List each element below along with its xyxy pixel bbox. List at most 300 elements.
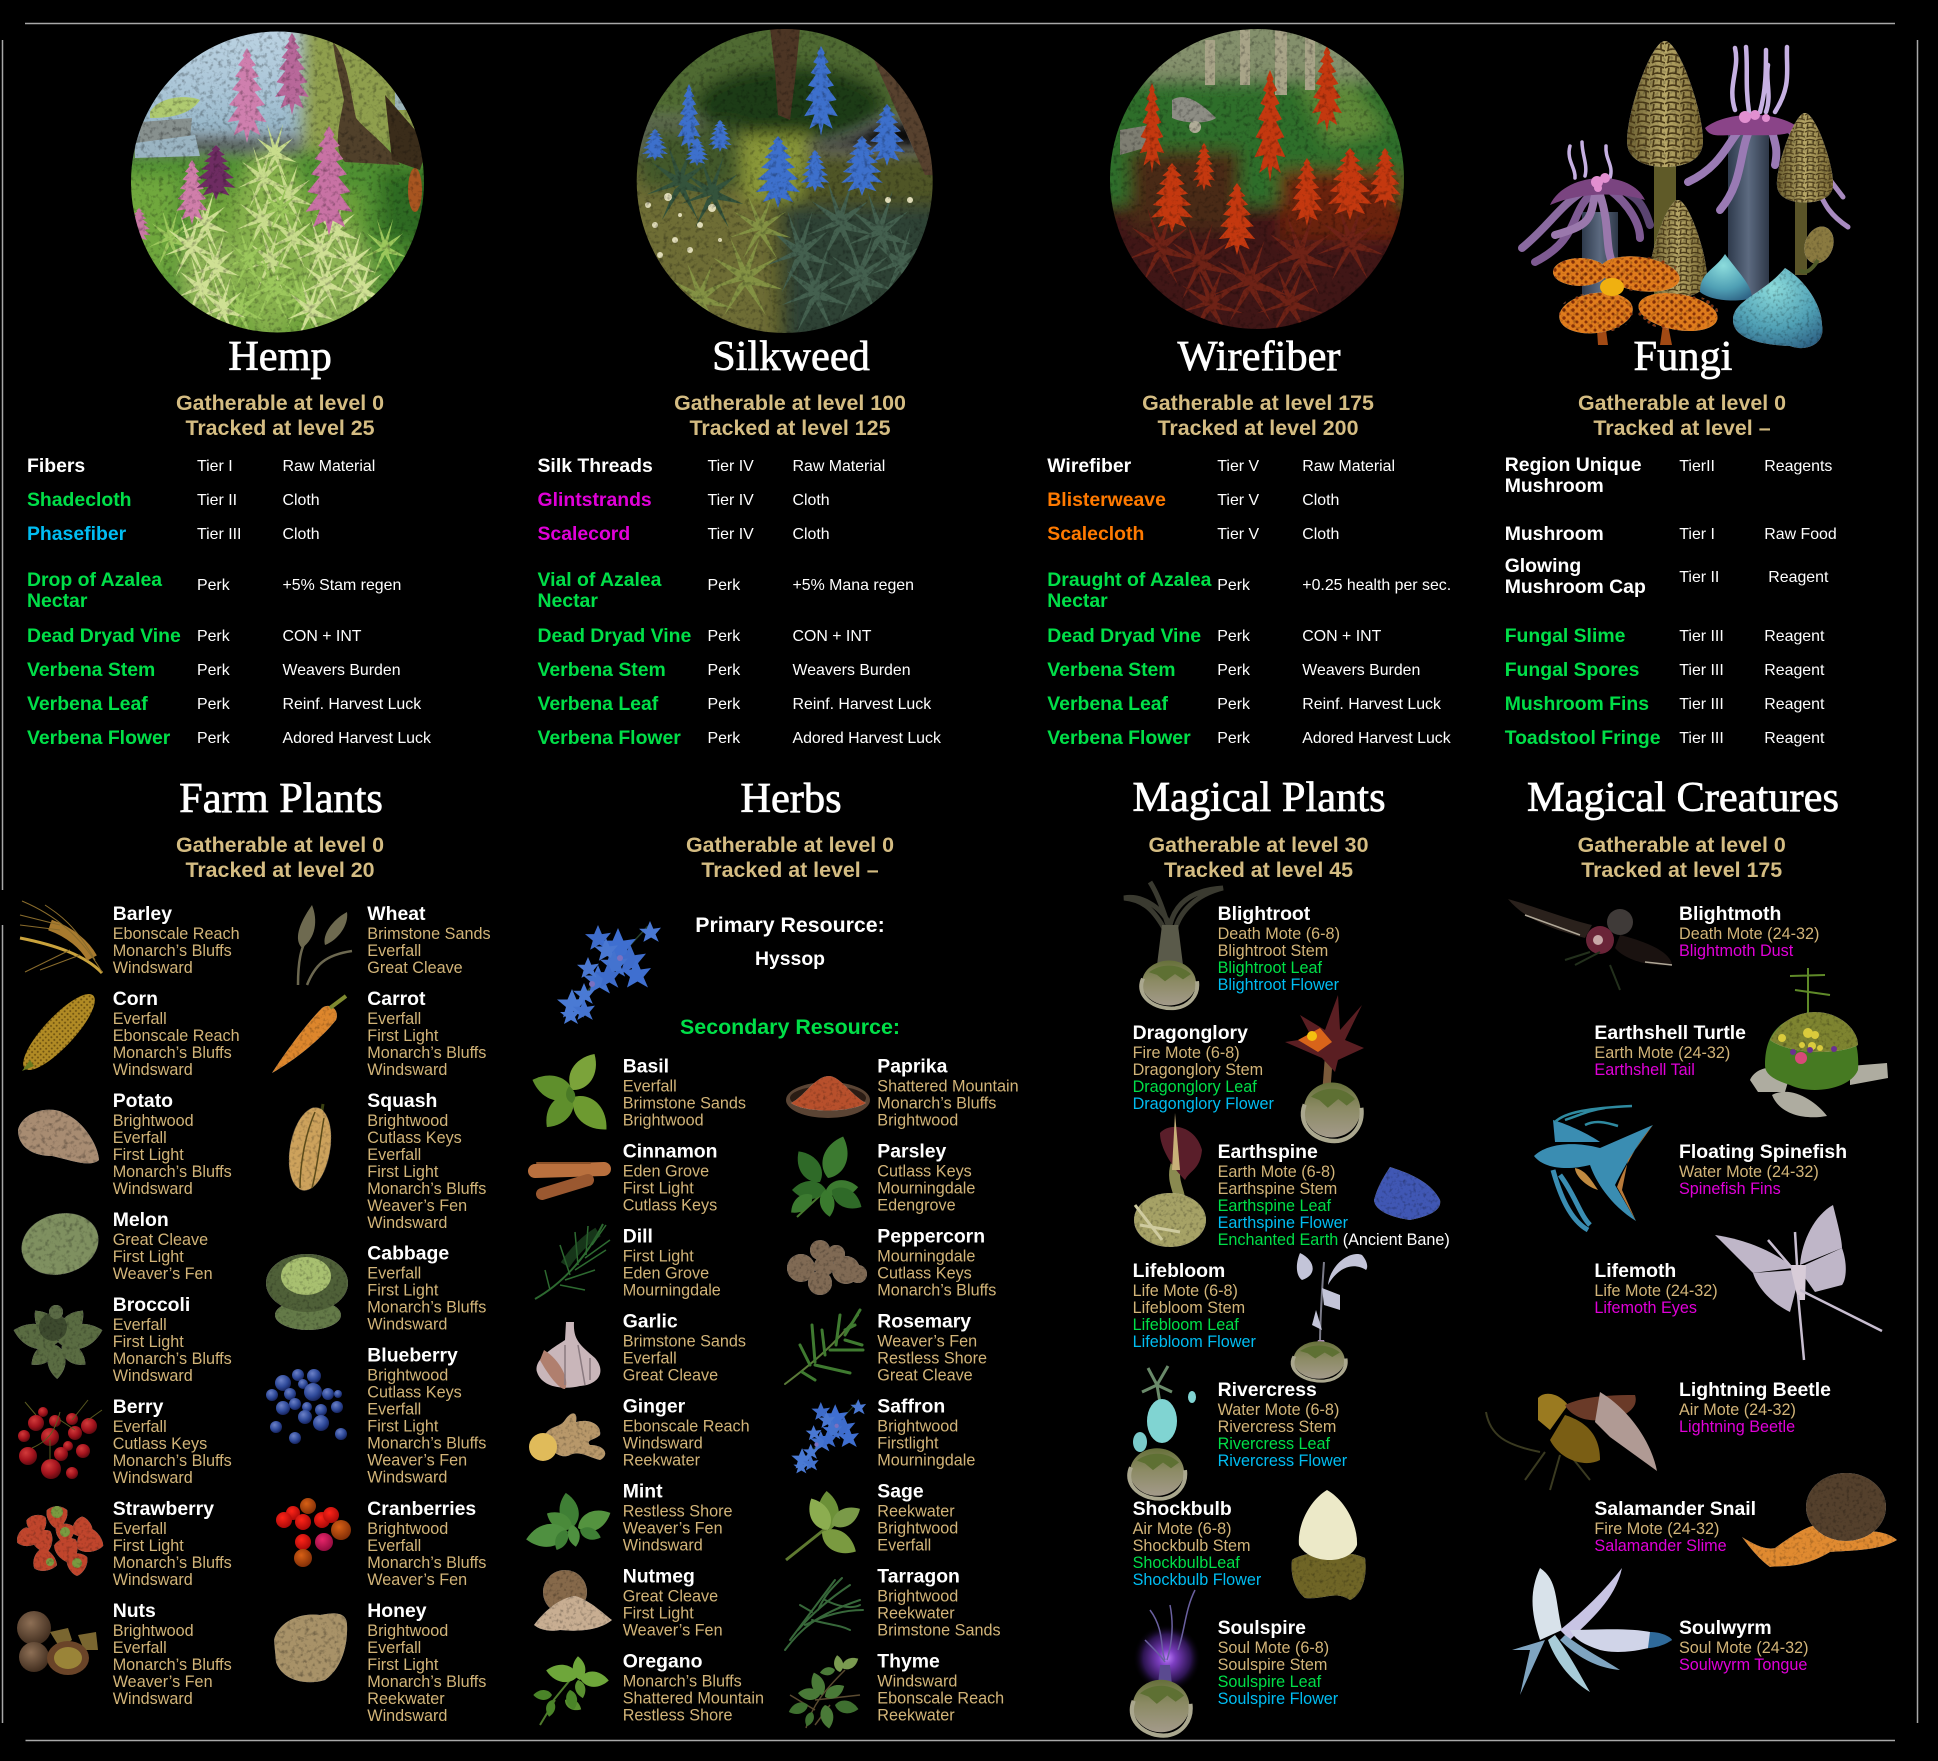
icon: broccoli — [11, 1305, 105, 1379]
text: Berry: Cutlass Keys — [113, 1435, 207, 1453]
table: Silkweed resources: Perk — [708, 577, 740, 594]
text: Squash: Monarch’s Bluffs — [367, 1180, 486, 1198]
icon: honey — [274, 1613, 347, 1682]
heading: Fungi: Fungi — [1634, 333, 1732, 380]
text: Thyme: Windsward — [877, 1672, 957, 1690]
text: Salamander Snail: Salamander Snail — [1594, 1498, 1756, 1520]
text: Lifemoth — [1594, 1260, 1718, 1317]
text: Cabbage: Windsward — [367, 1316, 447, 1334]
text: Rivercress: Rivercress Stem — [1218, 1418, 1336, 1436]
text: Floating Spinefish: Floating Spinefish — [1679, 1141, 1847, 1163]
text: Basil: Brightwood — [623, 1112, 704, 1130]
levels: Hemp — [176, 391, 384, 440]
table: Fungi resources: Mushroom — [1505, 475, 1604, 497]
text: Rivercress: Rivercress — [1218, 1379, 1317, 1401]
icon: ancient bane rock — [1374, 1167, 1440, 1220]
icon: barley — [20, 901, 102, 973]
text: Blueberry — [367, 1344, 486, 1486]
icon: potato — [18, 1110, 99, 1163]
text: Nuts: Everfall — [113, 1639, 167, 1657]
table: Fungi resources: Reagent — [1764, 662, 1825, 679]
text: Mint — [623, 1480, 732, 1554]
text: Shockbulb: Shockbulb — [1133, 1498, 1232, 1520]
text: Earthspine — [1218, 1141, 1450, 1249]
text: Corn: Everfall — [113, 1010, 167, 1028]
text: Nutmeg: Nutmeg — [623, 1566, 695, 1588]
text: Sage: Brightwood — [877, 1520, 958, 1538]
icon: mint — [524, 1491, 614, 1553]
text: Rivercress: Rivercress Leaf — [1218, 1435, 1331, 1453]
text: Soulspire: Soulspire Leaf — [1218, 1673, 1322, 1691]
text: Tarragon: Tarragon — [877, 1566, 960, 1588]
icon: rosemary — [785, 1310, 863, 1384]
levels: Magical Plants: Gatherable at level 30 — [1149, 833, 1369, 857]
text: Ginger: Ginger — [623, 1396, 686, 1418]
text: Blightroot: Blightroot Flower — [1218, 976, 1340, 994]
table: Silkweed resources: Verbena Stem — [538, 659, 666, 681]
text: Lightning Beetle: Lightning Beetle — [1679, 1379, 1831, 1401]
text: Nutmeg: First Light — [623, 1604, 694, 1622]
text: Potato — [113, 1090, 232, 1198]
text: Carrot: Monarch’s Bluffs — [367, 1044, 486, 1062]
icon: saffron — [791, 1399, 866, 1473]
text: Tarragon: Brimstone Sands — [877, 1622, 1001, 1640]
table: Wirefiber resources — [1047, 455, 1451, 749]
text: Shockbulb: ShockbulbLeaf — [1133, 1554, 1240, 1572]
levels: Silkweed — [674, 391, 906, 440]
table: Silkweed resources: Adored Harvest Luck — [792, 730, 941, 747]
panel: Wirefiber — [1047, 0, 1451, 749]
table: Silkweed resources: Glintstrands — [538, 489, 652, 511]
table: Hemp resources: Verbena Flower — [27, 727, 171, 749]
panel: Magical Plants — [1124, 774, 1450, 1736]
table: Fungi resources: Mushroom — [1505, 523, 1604, 545]
table: Wirefiber resources: Cloth — [1302, 492, 1339, 509]
text: Lifebloom: Lifebloom — [1133, 1260, 1225, 1282]
text: Earthspine: Earthspine — [1218, 1141, 1318, 1163]
text: Broccoli — [113, 1294, 232, 1385]
text: Barley — [113, 903, 240, 977]
icon: rivercress — [1129, 1366, 1196, 1499]
text: Potato: First Light — [113, 1146, 184, 1164]
icon: dill — [535, 1224, 610, 1299]
levels: Magical Plants — [1149, 833, 1369, 882]
table: Silkweed resources: Tier IV — [708, 526, 754, 543]
text: Paprika: Brightwood — [877, 1112, 958, 1130]
table: Wirefiber resources: Blisterweave — [1047, 489, 1166, 511]
text: Earthshell Turtle: Earthshell Tail — [1594, 1061, 1695, 1079]
text: Honey: First Light — [367, 1656, 439, 1674]
text: Saffron: Mourningdale — [877, 1452, 975, 1470]
icon: tarragon — [785, 1578, 863, 1650]
icon: oregano — [533, 1656, 609, 1725]
text: Cinnamon — [623, 1140, 717, 1214]
icon: garlic — [537, 1322, 600, 1389]
table: Hemp resources: Perk — [197, 577, 230, 594]
icon: soulwyrm — [1512, 1568, 1672, 1695]
image: hemp field circle — [131, 32, 424, 332]
levels: Fungi: Gatherable at level 0 — [1578, 391, 1786, 415]
text: Basil: Brimstone Sands — [623, 1094, 746, 1112]
text: Nuts: Brightwood — [113, 1622, 194, 1640]
text: Soulwyrm — [1679, 1617, 1809, 1674]
text: Honey: Monarch’s Bluffs — [367, 1673, 486, 1691]
text: Oregano — [623, 1650, 764, 1724]
text: Basil — [623, 1056, 746, 1130]
table: Hemp resources: Weavers Burden — [282, 662, 401, 679]
icon: dragonglory — [1285, 995, 1364, 1141]
text: Parsley: Parsley — [877, 1140, 947, 1162]
text: Mint: Mint — [623, 1480, 663, 1502]
text: Oregano: Oregano — [623, 1650, 703, 1672]
table: Hemp resources: Dead Dryad Vine — [27, 625, 181, 647]
text: Lifebloom — [1133, 1260, 1256, 1351]
text: Shockbulb: Shockbulb Stem — [1133, 1537, 1250, 1555]
text: Soulspire: Soulspire — [1218, 1617, 1306, 1639]
table: Hemp resources: Reinf. Harvest Luck — [282, 696, 421, 713]
table: Hemp resources: Drop of Azalea — [27, 569, 162, 591]
text: Rosemary: Rosemary — [877, 1310, 971, 1332]
table: Silkweed resources: Dead Dryad Vine — [538, 625, 691, 647]
table: Wirefiber resources: +0.25 health per sec. — [1302, 577, 1451, 594]
text: primary resource: Primary Resource: — [695, 913, 885, 937]
icon: blightmoth — [1508, 899, 1672, 990]
table: Hemp resources — [27, 455, 431, 749]
text: Broccoli: Windsward — [113, 1367, 193, 1385]
text: Carrot: Carrot — [367, 988, 426, 1010]
heading: Silkweed: Silkweed — [712, 333, 870, 380]
text: Soulspire: Soul Mote (6-8) — [1218, 1639, 1329, 1657]
text: Barley: Ebonscale Reach — [113, 925, 240, 943]
text: Nuts: Weaver’s Fen — [113, 1673, 213, 1691]
panel: Magical Creatures — [1486, 774, 1897, 1695]
text: Dragonglory: Dragonglory Flower — [1133, 1095, 1274, 1113]
text: Earthspine: Earthspine Stem — [1218, 1180, 1337, 1198]
table: Fungi resources: Toadstool Fringe — [1505, 727, 1661, 749]
icon: peppercorn — [787, 1240, 867, 1295]
text: Melon: Weaver’s Fen — [113, 1265, 213, 1283]
text: Potato: Monarch’s Bluffs — [113, 1163, 232, 1181]
table: Wirefiber resources: Tier V — [1217, 458, 1259, 475]
icon: squash — [283, 1104, 337, 1194]
text: Nuts: Nuts — [113, 1600, 156, 1622]
text: Peppercorn: Peppercorn — [877, 1226, 985, 1248]
text: Floating Spinefish: Spinefish Fins — [1679, 1180, 1781, 1198]
table: Silkweed resources: Tier IV — [708, 458, 754, 475]
table: Hemp resources: Tier I — [197, 458, 233, 475]
text: Dill: Mourningdale — [623, 1282, 721, 1300]
text: Dill: Eden Grove — [623, 1264, 709, 1282]
text: Cabbage: Cabbage — [367, 1242, 449, 1264]
table: Wirefiber resources: Weavers Burden — [1302, 662, 1420, 679]
text: Squash: Brightwood — [367, 1112, 448, 1130]
icon: strawberry — [14, 1506, 107, 1576]
text: Potato: Brightwood — [113, 1112, 194, 1130]
panel: Silkweed — [538, 29, 941, 744]
text: Garlic: Everfall — [623, 1350, 677, 1368]
text: Wheat: Wheat — [367, 903, 426, 925]
icon: salamander snail — [1742, 1473, 1897, 1567]
text: Rivercress — [1218, 1379, 1348, 1470]
table: Wirefiber resources: Verbena Stem — [1047, 659, 1176, 681]
text: Dragonglory: Dragonglory — [1133, 1022, 1248, 1044]
table: Silkweed resources: Nectar — [538, 590, 598, 612]
text: Honey — [367, 1600, 486, 1725]
heading: Herbs: Herbs — [740, 775, 842, 822]
text: Paprika: Paprika — [877, 1056, 948, 1078]
table: Fungi resources: Raw Food — [1764, 526, 1837, 543]
text: Strawberry: Monarch’s Bluffs — [113, 1554, 232, 1572]
table: Fungi resources: Reagent — [1764, 730, 1825, 747]
text: Corn: Corn — [113, 988, 158, 1010]
text: Garlic — [623, 1310, 746, 1384]
image: wirefiber field circle — [1110, 29, 1404, 329]
table: Fungi resources: Reagent — [1764, 696, 1825, 713]
levels: Hemp: Gatherable at level 0 — [176, 391, 384, 415]
table: Hemp resources: Raw Material — [282, 458, 375, 475]
text: Earthshell Turtle — [1594, 1022, 1746, 1079]
text: primary resource — [695, 913, 885, 970]
text: Floating Spinefish: Water Mote (24-32) — [1679, 1163, 1819, 1181]
heading: Wirefiber: Wirefiber — [1177, 333, 1341, 380]
table: Wirefiber resources: Cloth — [1302, 526, 1339, 543]
text: Blightroot: Blightroot Stem — [1218, 942, 1328, 960]
text: Cranberries: Weaver’s Fen — [367, 1571, 467, 1589]
text: Cabbage: Monarch’s Bluffs — [367, 1298, 486, 1316]
text: Peppercorn: Mourningdale — [877, 1248, 975, 1266]
icon: thyme — [787, 1654, 861, 1730]
text: Blueberry: Cutlass Keys — [367, 1384, 462, 1402]
text: Saffron — [877, 1396, 975, 1470]
text: Earthspine: Earth Mote (6-8) — [1218, 1163, 1335, 1181]
text: Rosemary: Weaver’s Fen — [877, 1332, 977, 1350]
icon: hyssop — [557, 921, 661, 1024]
icon: melon — [14, 1204, 106, 1284]
table: Wirefiber resources: Nectar — [1047, 590, 1108, 612]
text: Rosemary: Great Cleave — [877, 1366, 973, 1384]
text: Cinnamon: Cutlass Keys — [623, 1196, 717, 1214]
text: Honey: Everfall — [367, 1639, 421, 1657]
text: Carrot: Windsward — [367, 1061, 447, 1079]
levels: Wirefiber: Gatherable at level 175 — [1142, 391, 1374, 415]
text: Blightroot: Blightroot — [1218, 903, 1311, 925]
text: Nuts: Windsward — [113, 1690, 193, 1708]
text: Melon: Melon — [113, 1209, 169, 1231]
table: Wirefiber resources: Perk — [1217, 730, 1250, 747]
table: Hemp resources: +5% Stam regen — [282, 577, 401, 594]
text: Soulwyrm: Soulwyrm Tongue — [1679, 1656, 1807, 1674]
text: Lifemoth: Lifemoth Eyes — [1594, 1299, 1697, 1317]
levels: Hemp: Tracked at level 25 — [185, 416, 375, 440]
panel: Hemp — [27, 32, 431, 744]
text: Blightroot: Death Mote (6-8) — [1218, 925, 1340, 943]
image: fungi group — [1522, 41, 1848, 348]
text: secondary resource: Secondary Resource: — [680, 1015, 900, 1039]
text: primary resource: Hyssop — [755, 948, 825, 970]
table: Hemp resources: Shadecloth — [27, 489, 132, 511]
icon: corn — [14, 985, 104, 1079]
text: Nuts: Monarch’s Bluffs — [113, 1656, 232, 1674]
table: Hemp resources: CON + INT — [282, 628, 362, 645]
levels: Fungi — [1578, 391, 1786, 440]
text: Garlic: Garlic — [623, 1310, 678, 1332]
heading: Magical Creatures: Magical Creatures — [1527, 774, 1839, 821]
text: Blightmoth: Blightmoth — [1679, 903, 1781, 925]
text: Strawberry: Windsward — [113, 1571, 193, 1589]
text: Squash: Squash — [367, 1090, 437, 1112]
text: Broccoli: Everfall — [113, 1316, 167, 1334]
table: Wirefiber resources: Dead Dryad Vine — [1047, 625, 1201, 647]
text: Rosemary: Restless Shore — [877, 1350, 987, 1368]
levels: Farm Plants — [176, 833, 384, 882]
text: Squash: Everfall — [367, 1146, 421, 1164]
text: Wheat — [367, 903, 491, 977]
text: Saffron: Brightwood — [877, 1418, 958, 1436]
icon: wheat — [298, 905, 352, 985]
text: Earthshell Turtle: Earthshell Turtle — [1594, 1022, 1746, 1044]
icon: lifebloom — [1293, 1253, 1367, 1381]
text: Barley: Barley — [113, 903, 172, 925]
text: Cinnamon: First Light — [623, 1180, 694, 1198]
text: Dragonglory: Dragonglory Stem — [1133, 1061, 1263, 1079]
levels: Magical Creatures — [1578, 833, 1786, 882]
text: Blightroot — [1218, 903, 1340, 994]
levels: Silkweed: Tracked at level 125 — [690, 416, 891, 440]
levels: Herbs — [686, 833, 894, 882]
table: Silkweed resources: Verbena Flower — [538, 727, 681, 749]
table: Silkweed resources: Verbena Leaf — [538, 693, 659, 715]
text: Nutmeg — [623, 1566, 723, 1640]
text: Strawberry: Strawberry — [113, 1498, 214, 1520]
text: Blueberry: Brightwood — [367, 1366, 448, 1384]
text: Rivercress: Water Mote (6-8) — [1218, 1401, 1339, 1419]
text: Berry: Berry — [113, 1396, 164, 1418]
text: Lightning Beetle: Lightning Beetle — [1679, 1418, 1795, 1436]
table: Fungi resources: TierII — [1679, 458, 1715, 475]
table: Silkweed resources: Scalecord — [538, 523, 630, 545]
text: Squash: Windsward — [367, 1214, 447, 1232]
text: Mint: Windsward — [623, 1536, 703, 1554]
text: Broccoli: First Light — [113, 1333, 184, 1351]
text: Peppercorn: Cutlass Keys — [877, 1264, 972, 1282]
text: Strawberry — [113, 1498, 232, 1589]
text: Berry — [113, 1396, 232, 1487]
levels: Magical Plants: Tracked at level 45 — [1164, 858, 1353, 882]
text: Saffron: Saffron — [877, 1396, 945, 1418]
table: Silkweed resources: Perk — [708, 696, 740, 713]
table: Wirefiber resources: Adored Harvest Luck — [1302, 730, 1451, 747]
text: Paprika: Monarch’s Bluffs — [877, 1094, 996, 1112]
table: Wirefiber resources: Perk — [1217, 696, 1250, 713]
text: Thyme: Reekwater — [877, 1706, 955, 1724]
text: Barley: Monarch’s Bluffs — [113, 942, 232, 960]
text: Corn: Windsward — [113, 1061, 193, 1079]
table: Fungi resources: Mushroom Fins — [1505, 693, 1649, 715]
table: Silkweed resources: Weavers Burden — [792, 662, 911, 679]
text: Blightroot: Blightroot Leaf — [1218, 959, 1322, 977]
table: Silkweed resources: Perk — [708, 628, 740, 645]
text: Soulspire: Soulspire Stem — [1218, 1656, 1327, 1674]
text: Strawberry: Everfall — [113, 1520, 167, 1538]
icon: earthspine — [1134, 1113, 1206, 1247]
table: Hemp resources: Cloth — [282, 526, 320, 543]
text: Soulspire — [1218, 1617, 1339, 1708]
text: Saffron: Firstlight — [877, 1434, 939, 1452]
table: Hemp resources: Tier II — [197, 492, 237, 509]
text: Nutmeg: Weaver’s Fen — [623, 1622, 723, 1640]
panel: Farm Plants — [11, 775, 491, 1725]
text: Basil: Basil — [623, 1056, 669, 1078]
table: Fungi resources: Glowing — [1505, 555, 1581, 577]
text: Lifebloom: Life Mote (6-8) — [1133, 1282, 1238, 1300]
text: Shockbulb: Shockbulb Flower — [1133, 1571, 1262, 1589]
text: Sage: Reekwater — [877, 1502, 955, 1520]
text: Corn — [113, 988, 240, 1079]
icon: nutmeg — [534, 1570, 612, 1631]
table: Fungi resources: Reagent — [1764, 628, 1825, 645]
text: Earthspine: Earthspine Leaf — [1218, 1197, 1331, 1215]
table: Wirefiber resources: Scalecloth — [1047, 523, 1144, 545]
table: Silkweed resources: Vial of Azalea — [538, 569, 662, 591]
table: Wirefiber resources: Reinf. Harvest Luck — [1302, 696, 1441, 713]
text: Potato: Potato — [113, 1090, 173, 1112]
table: Hemp resources: Perk — [197, 696, 230, 713]
icon: lifemoth — [1715, 1205, 1882, 1360]
text: Peppercorn: Monarch’s Bluffs — [877, 1282, 996, 1300]
panel: Fungi — [1505, 41, 1848, 749]
table: Hemp resources: Adored Harvest Luck — [282, 730, 431, 747]
table: Hemp resources: Verbena Leaf — [27, 693, 148, 715]
text: Oregano: Monarch’s Bluffs — [623, 1672, 742, 1690]
text: Soulwyrm: Soul Mote (24-32) — [1679, 1639, 1809, 1657]
table: Wirefiber resources: Draught of Azalea — [1047, 569, 1212, 591]
text: Cinnamon: Eden Grove — [623, 1162, 709, 1180]
text: Ginger: Reekwater — [623, 1452, 701, 1470]
levels: Magical Creatures: Gatherable at level 0 — [1578, 833, 1786, 857]
text: Earthshell Turtle: Earth Mote (24-32) — [1594, 1044, 1730, 1062]
icon: shockbulb — [1292, 1490, 1366, 1600]
table: Wirefiber resources: Perk — [1217, 577, 1250, 594]
text: Honey: Windsward — [367, 1707, 447, 1725]
text: Blueberry: Blueberry — [367, 1344, 458, 1366]
icon: nuts — [17, 1611, 98, 1675]
text: Parsley: Edengrove — [877, 1196, 956, 1214]
text: Peppercorn — [877, 1226, 996, 1300]
levels: Fungi: Tracked at level – — [1593, 416, 1771, 440]
levels: Wirefiber — [1142, 391, 1374, 440]
text: Carrot — [367, 988, 486, 1079]
heading: Magical Plants: Magical Plants — [1132, 774, 1386, 821]
text: Wheat: Brimstone Sands — [367, 925, 491, 943]
icon: sage — [786, 1490, 864, 1561]
levels: Wirefiber: Tracked at level 200 — [1158, 416, 1359, 440]
text: Potato: Everfall — [113, 1129, 167, 1147]
levels: Herbs: Gatherable at level 0 — [686, 833, 894, 857]
text: Berry: Windsward — [113, 1469, 193, 1487]
image: silkweed field circle — [636, 29, 933, 333]
text: Ginger — [623, 1396, 750, 1470]
table: Fungi resources: Reagent — [1768, 569, 1829, 586]
text: Melon: Great Cleave — [113, 1231, 208, 1249]
text: Parsley: Cutlass Keys — [877, 1162, 972, 1180]
levels: Farm Plants: Gatherable at level 0 — [176, 833, 384, 857]
table: Wirefiber resources: Verbena Leaf — [1047, 693, 1169, 715]
table: Silkweed resources: Perk — [708, 662, 740, 679]
text: Tarragon — [877, 1566, 1001, 1640]
text: Salamander Snail: Salamander Slime — [1594, 1537, 1727, 1555]
text: Ginger: Ebonscale Reach — [623, 1418, 750, 1436]
text: Lightning Beetle — [1679, 1379, 1831, 1436]
